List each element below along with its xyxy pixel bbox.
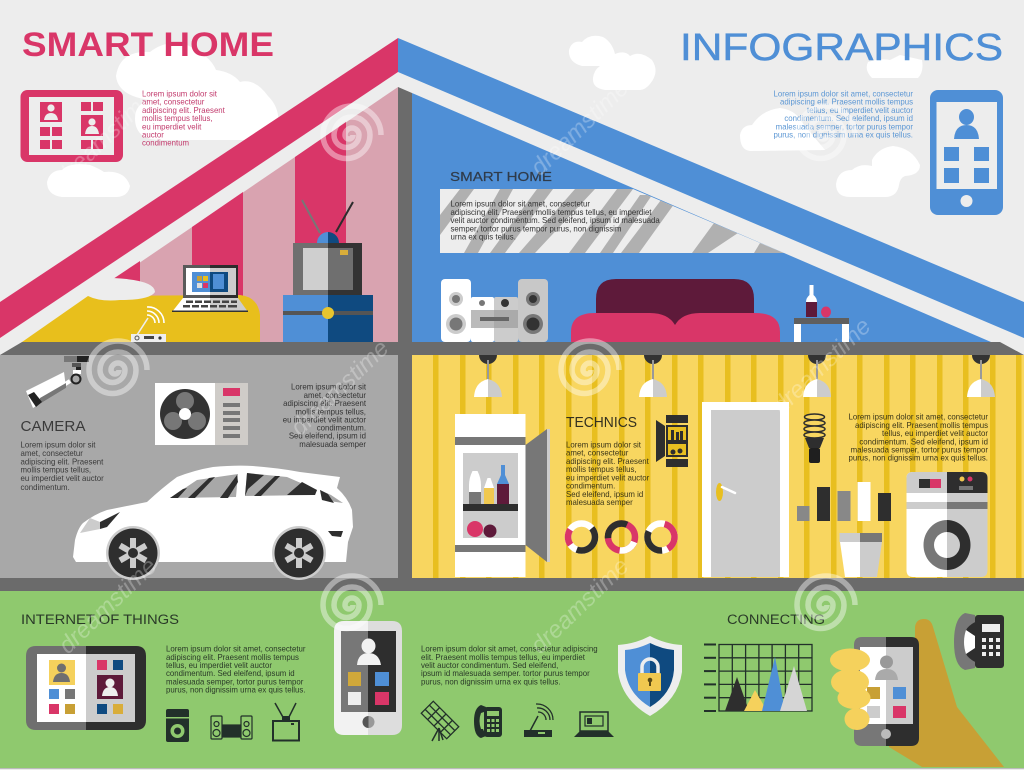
text block: technics: mollis tempus tellus, <box>566 465 637 474</box>
icon: phone <box>334 621 402 735</box>
icon: laptop small <box>574 712 614 737</box>
text block: internet of things: adipiscing elit. Praesent mollis tempus <box>166 653 299 662</box>
chart: connecting grid with peaks <box>704 644 812 712</box>
panel: technics room <box>412 355 1024 578</box>
panel: window with stripes <box>440 189 784 253</box>
bottom strip <box>0 768 1024 770</box>
text block: internet of things: malesuada semper, tortor purus tempor <box>166 677 304 686</box>
bar chart <box>797 482 891 521</box>
text block: blue intro: tellus, eu imperdiet velit auctor <box>807 106 913 115</box>
text block: garage right: Sed eleifend, ipsum id <box>289 432 366 441</box>
icon: solar panel <box>421 701 459 741</box>
text block: connecting: elit. Praesent mollis tempus tellus, eu imperdiet <box>421 653 586 662</box>
text block: technics right: malesuada semper, tortor purus tempor <box>851 446 988 454</box>
panel: garage room <box>0 355 398 578</box>
text block: window: velit auctor condimentum. Sed eleifend, ipsum id malesuada <box>450 216 660 225</box>
text block: connecting: purus, non dignissim urna ex quis tellus. <box>421 677 561 686</box>
text block: technics right: tellus, eu imperdiet velit auctor <box>882 429 988 438</box>
title: infographics: INFOGRAPHICS <box>680 27 1003 69</box>
roof: blue band <box>398 38 1024 338</box>
icon: pillow <box>88 278 155 300</box>
icon: open fridge <box>455 414 550 577</box>
icon: desk phone small <box>474 705 502 738</box>
text block: technics: eu imperdiet velit auctor <box>566 474 650 482</box>
text block: camera: adipiscing elit. Praesent <box>20 457 104 466</box>
text block: technics right: Lorem ipsum dolor sit amet, consectetur <box>848 412 988 422</box>
icons: donut charts <box>568 524 674 550</box>
text block: pink intro: amet, consectetur <box>142 98 205 107</box>
text block: connecting <box>421 644 598 686</box>
wall between attic rooms <box>398 87 412 342</box>
text block: camera: Lorem ipsum dolor sit <box>20 440 96 450</box>
text block: camera: eu imperdiet velit auctor <box>20 474 104 483</box>
text block: internet of things <box>166 644 306 695</box>
watermark: dreamstime <box>767 313 876 419</box>
text block: pink intro: Lorem ipsum dolor sit <box>142 90 218 98</box>
text block: camera: amet, consectetur <box>20 449 83 458</box>
icon: router small <box>524 704 553 737</box>
heading: internet of things: INTERNET OF THINGS <box>21 612 179 627</box>
structure: floors and walls <box>0 342 1024 591</box>
text block: technics <box>566 440 650 507</box>
text block: connecting: velit auctor condimentum. Sed eleifend, <box>421 661 558 670</box>
text block: connecting: Lorem ipsum dolor sit amet, consectetur adipiscing <box>421 644 598 654</box>
icon: stereo system <box>441 279 548 342</box>
icon: side table with bottle <box>794 285 849 342</box>
heading: smart home: SMART HOME <box>450 169 552 184</box>
icon: hand holding phone <box>830 619 1004 767</box>
heading: connecting: CONNECTING <box>727 612 825 627</box>
text block: technics: Lorem ipsum dolor sit <box>566 440 642 450</box>
text block: pink intro: auctor <box>142 130 164 140</box>
text block: pink intro: mollis tempus tellus, <box>142 114 213 123</box>
text block: blue intro: adipiscing elit. Praesent mollis tempus <box>780 98 913 107</box>
icons: ceiling lamps <box>474 355 995 397</box>
watermark: dreamstime <box>525 553 634 659</box>
text block: technics: Sed eleifend, ipsum id <box>566 490 643 499</box>
text block: internet of things: tellus, eu imperdiet velit auctor <box>166 661 272 670</box>
text block: window <box>450 200 660 242</box>
watermark: dreamstime <box>285 335 394 441</box>
text block: internet of things: condimentum. Sed eleifend, ipsum id <box>166 669 295 678</box>
text block: connecting: ipsum id malesuada semper. tortor purus tempor <box>421 669 590 678</box>
text block: window: semper, tortor purus tempor purus, non dignissim <box>450 224 622 234</box>
watermark <box>50 75 876 659</box>
text block: blue intro: purus, non dignissim urna ex quis tellus. <box>773 130 913 140</box>
text block: pink intro: adipiscing elit. Praesent <box>142 106 226 115</box>
watermark: dreamstime <box>53 553 162 659</box>
icon: desk phone <box>954 613 1004 670</box>
text block: garage right: eu imperdiet velit auctor <box>283 416 366 424</box>
icon: washer small <box>166 709 189 742</box>
text block: camera <box>20 440 104 492</box>
text block: blue intro: malesuada semper, tortor purus tempor <box>776 122 913 131</box>
heading: camera: CAMERA <box>20 418 86 435</box>
icon: television <box>293 200 362 295</box>
title: smart home: SMART HOME <box>22 26 274 64</box>
text block: technics right: condimentum. Sed eleifend, ipsum id <box>859 437 988 446</box>
text block: window: urna ex quis tellus. <box>450 233 516 242</box>
cabinet <box>283 295 373 342</box>
text block: technics right: adipiscing elit. Praesent mollis tempus <box>855 421 988 430</box>
text block: camera: condimentum. <box>20 483 70 492</box>
text block: technics: malesuada semper <box>566 498 633 507</box>
watermark: dreamstime <box>50 85 159 191</box>
text block: technics: amet, consectetur <box>566 449 629 458</box>
text block: technics: adipiscing elit. Praesent <box>566 457 650 466</box>
icon: stereo small <box>211 716 252 739</box>
icon: pink tablet <box>20 90 123 162</box>
panel: attic pink room <box>22 87 398 342</box>
text block: window: Lorem ipsum dolor sit amet, consectetur <box>450 200 590 208</box>
icon: laptop <box>172 265 248 312</box>
icon: blue phone <box>930 90 1003 215</box>
text block: blue intro: Lorem ipsum dolor sit amet, consectetur <box>773 90 913 98</box>
panel: internet of things <box>0 591 1024 768</box>
text block: internet of things: Lorem ipsum dolor sit amet, consectetur <box>166 644 306 654</box>
icon: washing machine <box>906 472 988 577</box>
bed <box>22 295 260 342</box>
text block: internet of things: purus, non dignissim urna ex quis tellus. <box>166 686 306 695</box>
text block: pink intro: eu imperdiet velit <box>142 122 202 131</box>
text block: garage right: adipiscing elit. Praesent <box>283 399 367 408</box>
panel: attic blue room <box>412 93 991 342</box>
text block: window: adipiscing elit. Praesent mollis tempus tellus, eu imperdiet <box>450 208 652 217</box>
text block: pink intro <box>142 90 226 148</box>
text block: pink intro: condimentum <box>142 139 190 148</box>
text block: blue intro: condimentum. Sed eleifend, ipsum id <box>784 114 913 123</box>
icon: cup <box>840 533 882 577</box>
watermark: dreamstime <box>525 75 634 181</box>
text block: camera: mollis tempus tellus, <box>20 466 91 474</box>
heading: technics: TECHNICS <box>566 415 637 431</box>
text block: garage right: mollis tempus tellus, <box>295 407 366 416</box>
text block: garage right: Lorem ipsum dolor sit <box>291 382 367 392</box>
icon: shield with lock <box>618 636 682 716</box>
icon: tablet <box>26 646 146 730</box>
text block: garage right: amet, consectetur <box>304 391 366 400</box>
icon: car <box>73 466 353 580</box>
icon: tv small <box>273 703 299 740</box>
icon: security camera <box>26 356 89 408</box>
icon: air conditioner <box>155 383 248 445</box>
icon: small fridge <box>656 415 688 467</box>
text block: technics: condimentum. <box>566 482 615 491</box>
text block: garage right: condimentum. <box>317 424 366 433</box>
text block: garage right: malesuada semper <box>299 440 366 449</box>
roof: pink band <box>0 38 398 338</box>
icon: door <box>702 402 789 577</box>
clouds <box>47 36 922 197</box>
text block: technics right: purus, non dignissim urna ex quis tellus. <box>848 454 988 463</box>
text block: garage right <box>283 382 367 449</box>
text block: technics right <box>848 412 988 463</box>
icon: sofa <box>571 279 780 342</box>
text block: blue intro <box>773 90 913 140</box>
icon: spiral light bulb <box>804 414 825 463</box>
icon: router <box>131 307 166 342</box>
